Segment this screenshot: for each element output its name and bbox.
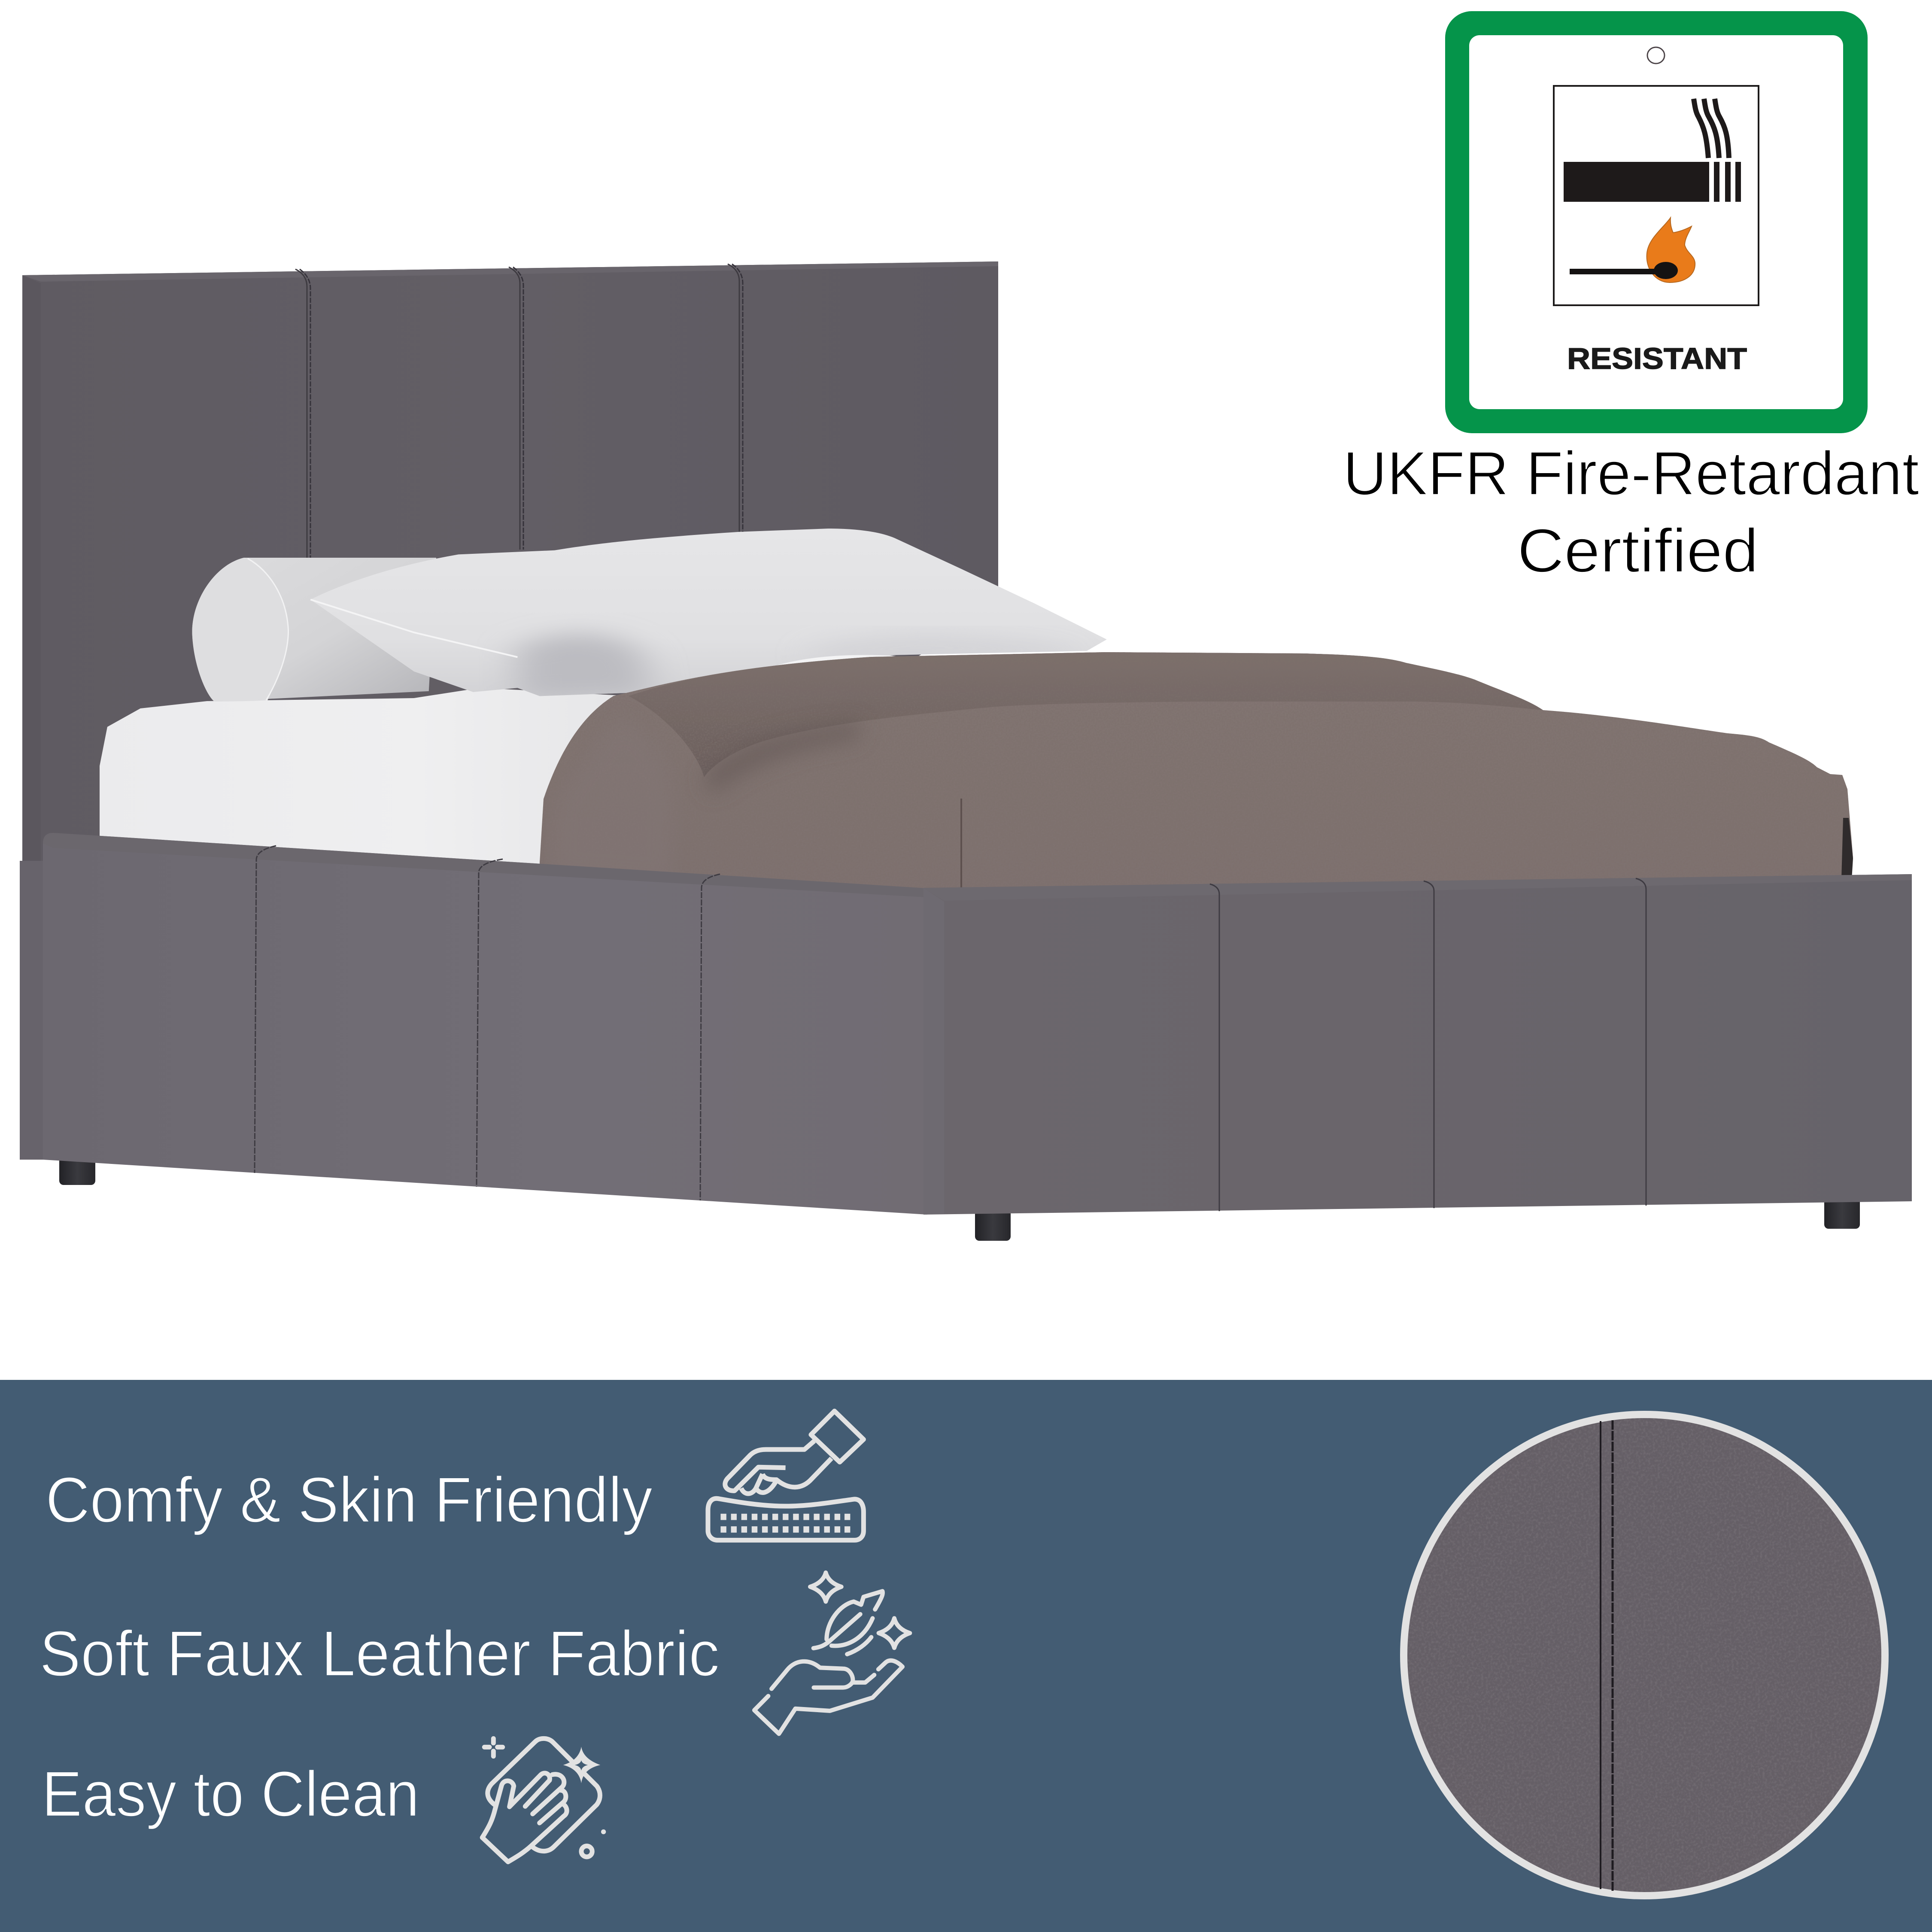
symbol box (1554, 86, 1759, 375)
feature text: fabric: Soft Faux Leather Fabric (39, 1617, 720, 1689)
icon: hand on mattress (708, 1411, 863, 1540)
pleat lines (960, 799, 962, 889)
legs (59, 1155, 1860, 1241)
icon: hand wiping with cloth (482, 1738, 606, 1862)
foot panel (923, 874, 1912, 1215)
bolster cushion (192, 558, 436, 702)
certification caption: UKFR Fire-Retardant (1343, 439, 1919, 508)
icon: flame (1647, 218, 1695, 283)
fire resistant badge (1445, 11, 1868, 433)
icon: match (1570, 262, 1678, 279)
badge hole (1647, 47, 1665, 64)
badge label: RESISTANT (1567, 342, 1747, 375)
pillow (310, 529, 1107, 700)
panel: features (0, 1380, 1932, 1932)
blanket fold shadow (550, 713, 859, 884)
fitted sheet (100, 688, 629, 902)
icon: hand with feather (754, 1573, 910, 1734)
icon: cigarette (1564, 162, 1741, 202)
blanket top fold and main body (540, 652, 1853, 897)
feature text: comfy: Comfy & Skin Friendly (46, 1464, 653, 1536)
certification caption: Certified (1517, 516, 1759, 585)
icon: smoke (1694, 99, 1729, 158)
leather swatch (1400, 1411, 1889, 1899)
headboard (20, 261, 998, 1160)
feature text: clean: Easy to Clean (42, 1758, 419, 1830)
blanket (540, 652, 1853, 897)
swatch seam (1600, 1421, 1601, 1889)
certification caption (1343, 439, 1919, 585)
background (0, 0, 1932, 1380)
side rail (43, 833, 927, 1215)
bed illustration (20, 261, 1912, 1241)
swatch stitching (1612, 1420, 1613, 1891)
blanket roll (629, 652, 1543, 777)
